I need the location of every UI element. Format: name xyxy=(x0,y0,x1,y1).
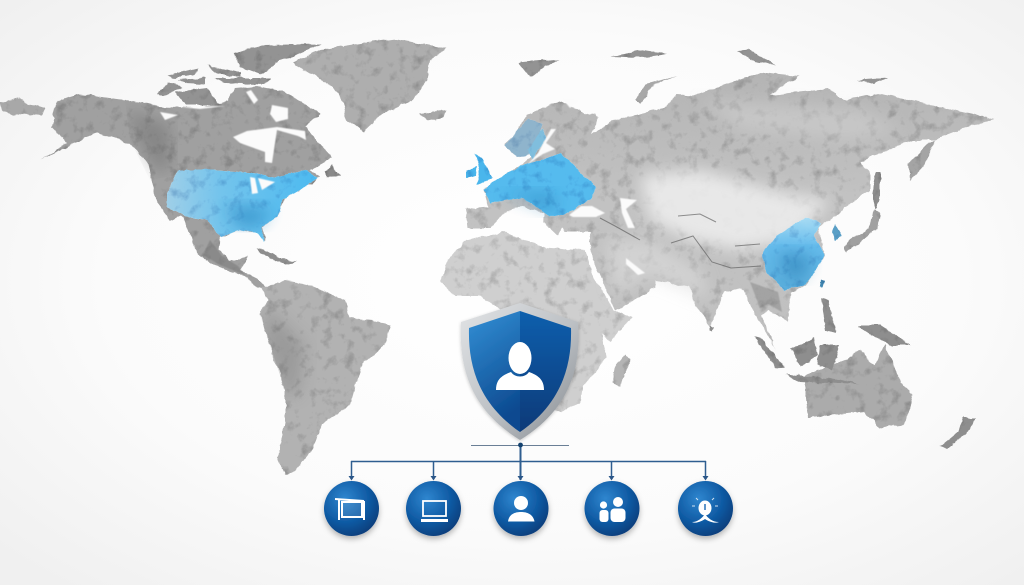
icon: person xyxy=(496,342,544,390)
node: idea icon xyxy=(678,481,733,536)
node: person icon xyxy=(494,481,548,536)
light central Asia xyxy=(640,170,830,250)
Japan xyxy=(844,210,880,252)
dark Andes xyxy=(265,305,305,395)
node: group icon xyxy=(584,481,640,536)
USA xyxy=(167,170,318,242)
North America xyxy=(40,86,332,290)
Chukotka fragment xyxy=(0,98,45,116)
connector tree xyxy=(348,443,708,480)
shield rim xyxy=(461,303,579,440)
land masses xyxy=(0,39,995,476)
dark Rocky Mountains xyxy=(125,110,170,170)
Greenland xyxy=(292,39,447,132)
dark blue shading xyxy=(225,192,812,278)
Arctic islands xyxy=(157,44,888,105)
light Siberia band xyxy=(700,100,900,140)
node: frame icon xyxy=(324,481,379,536)
Newfoundland xyxy=(323,165,340,177)
New Zealand xyxy=(940,418,975,449)
Iceland xyxy=(420,110,447,121)
Korea xyxy=(832,224,842,241)
Southeast USA xyxy=(225,205,272,226)
light Arabia and India xyxy=(605,240,710,300)
Madagascar xyxy=(612,355,630,387)
seas and inland water xyxy=(160,90,645,275)
node: laptop icon xyxy=(406,481,461,536)
Europe xyxy=(483,153,596,217)
Taiwan xyxy=(819,279,824,288)
Kamchatka xyxy=(908,140,935,181)
Eurasia xyxy=(466,72,995,349)
shield right half xyxy=(520,311,571,432)
South America xyxy=(260,280,390,476)
highlighted regions xyxy=(167,119,842,290)
Central Europe xyxy=(500,192,555,212)
shield left half xyxy=(469,311,520,432)
Novaya Zemlya xyxy=(635,76,678,104)
Himalaya ridges xyxy=(600,214,761,268)
Cuba xyxy=(256,249,297,264)
shield xyxy=(461,303,579,440)
South China xyxy=(778,252,812,278)
Australia xyxy=(805,345,913,428)
Sweden and Finland xyxy=(528,128,546,160)
dark Central America xyxy=(203,240,245,275)
Sakhalin Kuril xyxy=(872,172,880,210)
terrain shading xyxy=(125,100,900,395)
Southeast Asian islands xyxy=(710,298,910,385)
Britain xyxy=(475,153,492,185)
Ireland xyxy=(466,166,477,178)
China xyxy=(761,217,825,290)
dark Indochina xyxy=(750,282,782,312)
Scandinavia xyxy=(505,119,543,157)
Africa xyxy=(441,232,633,412)
